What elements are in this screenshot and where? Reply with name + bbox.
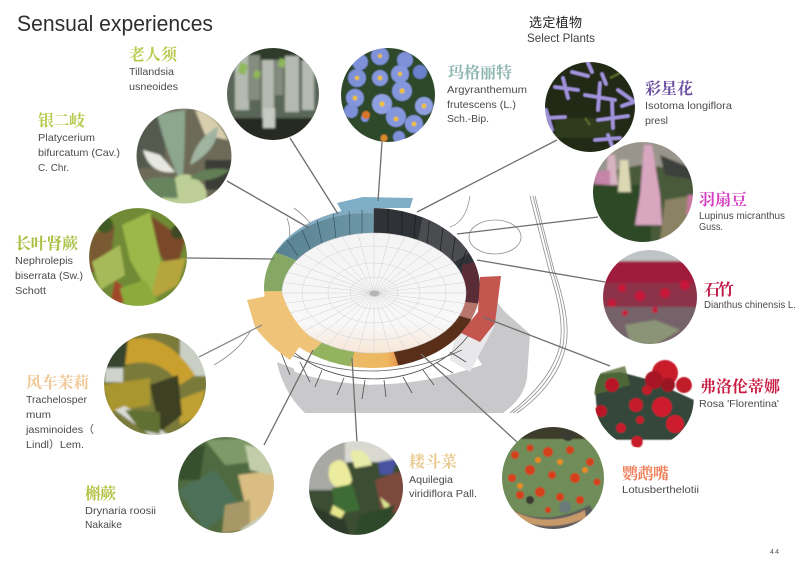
photo: Lotus xyxy=(500,425,607,530)
ring segment: orange xyxy=(346,352,398,368)
label: Trachelospermum: jasminoides（ xyxy=(25,424,94,436)
label: Lupinus xyxy=(699,191,785,233)
label: Aquilegia: Aquilegia xyxy=(409,474,453,486)
plant: Aquilegia viridiflora xyxy=(307,440,477,536)
photo: Isotoma xyxy=(543,60,638,154)
white under-ring band xyxy=(290,345,482,384)
label: Rosa: 弗洛伦蒂娜 xyxy=(700,377,780,396)
photo: Aquilegia xyxy=(307,440,407,536)
label: Drynaria: 槲蕨 xyxy=(85,484,116,503)
label: Tillandsia xyxy=(129,45,178,93)
label: Drynaria: Nakaike xyxy=(85,519,122,531)
title: Sensual experiences xyxy=(17,11,213,36)
plant: Dianthus chinensis xyxy=(601,248,796,346)
ring segment: dark glass xyxy=(374,208,480,284)
plant: Argyranthemum frutescens xyxy=(340,46,527,144)
stadium plan diagram xyxy=(214,196,568,414)
label: Isotoma: presl xyxy=(645,115,668,127)
label: Platycerium: Platycerium xyxy=(38,132,95,144)
ring segment: brown xyxy=(394,316,472,366)
label: Trachelospermum: mum xyxy=(26,409,51,421)
label: Rosa xyxy=(699,377,780,410)
ring panel: top blue xyxy=(337,197,413,212)
ground shadow xyxy=(277,302,530,413)
ring segment: yellow base xyxy=(264,290,322,354)
label: Lupinus: Lupinus micranthus xyxy=(699,210,785,222)
photo: Rosa xyxy=(590,360,694,450)
ring panel: red xyxy=(461,276,501,342)
label: Dianthus xyxy=(704,280,796,311)
label: Platycerium: bifurcatum (Cav.) xyxy=(38,147,120,159)
photo: Drynaria xyxy=(176,436,276,534)
photo: Lupinus xyxy=(591,141,696,245)
label: Isotoma: 彩星花 xyxy=(645,79,693,98)
label: Lupinus: Guss. xyxy=(699,221,723,233)
label: Tillandsia: 老人须 xyxy=(129,45,178,64)
label: Nephrolepis: biserrata (Sw.) xyxy=(15,270,83,282)
photo: Dianthus xyxy=(601,248,701,346)
label: Lotus xyxy=(622,464,699,496)
photo: Nephrolepis xyxy=(88,207,188,308)
plant: Isotoma longiflora xyxy=(543,60,732,154)
label: Isotoma: Isotoma longiflora xyxy=(645,100,732,112)
ring segment: blue glass xyxy=(269,208,374,264)
ring segment: rose xyxy=(459,302,478,325)
label: Argyranthemum: 玛格丽特 xyxy=(448,63,512,82)
label: Trachelospermum xyxy=(25,373,94,451)
label: Lupinus: 羽扇豆 xyxy=(699,191,747,209)
wire cage xyxy=(262,300,484,399)
label: Argyranthemum: Argyranthemum xyxy=(447,84,527,96)
label: Platycerium: C. Chr. xyxy=(38,162,69,174)
label: Nephrolepis: 长叶肾蕨 xyxy=(15,234,78,253)
ring wedges xyxy=(264,208,480,368)
ring panel: yellow xyxy=(247,293,308,360)
plant: Tillandsia usneoides xyxy=(129,45,321,144)
label: Argyranthemum xyxy=(447,63,527,125)
label: Trachelospermum: Lindl）Lem. xyxy=(26,439,84,451)
label: Lotus: 鹦鹉嘴 xyxy=(622,464,669,483)
leader lines xyxy=(187,138,610,445)
plant: Lotus berthelotii xyxy=(500,425,699,530)
photo: Argyranthemum xyxy=(340,46,436,144)
heading: select plants: 选定植物 xyxy=(529,15,582,30)
photo: Platycerium xyxy=(135,108,235,206)
ring segment: green bottom xyxy=(312,342,354,366)
ring segment: dark red glass xyxy=(462,262,480,306)
label: Tillandsia: Tillandsia xyxy=(129,66,174,78)
label: Nephrolepis: Schott xyxy=(15,285,46,297)
photo: Tillandsia xyxy=(227,48,319,140)
plant: Lupinus micranthus xyxy=(591,141,785,245)
label: Lotus: Lotusberthelotii xyxy=(622,484,699,496)
label: Argyranthemum: frutescens (L.) xyxy=(447,99,516,111)
plant: Platycerium bifurcatum xyxy=(38,108,235,206)
label: Platycerium: 银二岐 xyxy=(38,111,85,130)
label: Tillandsia: usneoides xyxy=(129,81,178,93)
label: Rosa: Rosa 'Florentina' xyxy=(699,398,779,410)
label: Aquilegia xyxy=(409,452,477,500)
dome xyxy=(282,233,466,353)
label: Drynaria xyxy=(85,484,156,531)
plant: Rosa Florentina xyxy=(590,360,780,450)
label: Platycerium xyxy=(38,111,120,174)
heading: select plants: Select Plants xyxy=(527,31,595,45)
label: Aquilegia: 耧斗菜 xyxy=(409,452,457,471)
heading: select plants xyxy=(527,15,595,45)
road curves xyxy=(214,196,567,413)
label: Aquilegia: viridiflora Pall. xyxy=(409,488,477,500)
label: Argyranthemum: Sch.-Bip. xyxy=(447,113,489,125)
label: Nephrolepis: Nephrolepis xyxy=(15,255,73,267)
photo: Trachelospermum xyxy=(103,332,210,436)
label: Drynaria: Drynaria roosii xyxy=(85,505,156,517)
page number: 44 xyxy=(770,549,779,556)
plant: Trachelospermum jasminoides xyxy=(25,332,210,451)
label: Isotoma xyxy=(645,79,732,127)
label: Dianthus: 石竹 xyxy=(704,280,734,299)
label: Trachelospermum: 风车茉莉 xyxy=(26,373,89,392)
label: Nephrolepis xyxy=(15,234,83,297)
label: Trachelospermum: Trachelosper xyxy=(26,394,88,406)
ring segment: green left xyxy=(264,252,296,292)
plant: Drynaria roosii xyxy=(85,436,276,534)
plant: Nephrolepis biserrata xyxy=(15,207,188,308)
